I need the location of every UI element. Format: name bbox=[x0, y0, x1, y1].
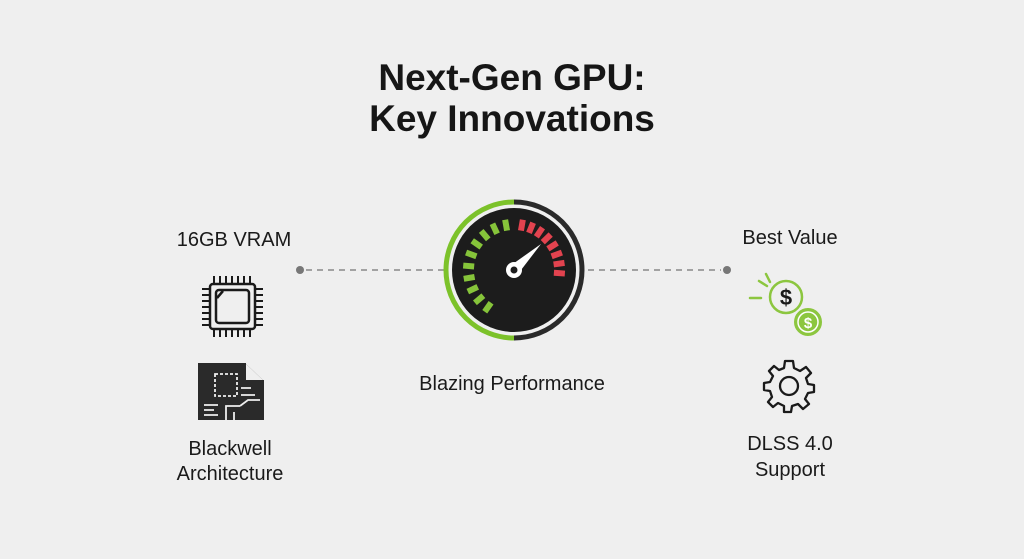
label: Best Value: Best Value bbox=[742, 227, 838, 249]
connector right bbox=[588, 266, 731, 274]
label: Blackwell Architecture: Blackwell bbox=[188, 438, 272, 460]
label: 16GB VRAM: 16GB VRAM bbox=[177, 229, 291, 251]
label: Blackwell Architecture: Architecture bbox=[177, 463, 283, 485]
icon: chip bbox=[202, 276, 263, 337]
title: Next-Gen GPU: bbox=[378, 57, 646, 98]
connector left bbox=[296, 266, 446, 274]
icon: blueprint bbox=[198, 363, 264, 420]
icon: gear bbox=[764, 361, 814, 412]
label: DLSS 4.0 Support bbox=[747, 433, 833, 481]
icon: coins: $ bbox=[804, 315, 813, 332]
icon: coins bbox=[750, 274, 823, 337]
icon: coins: $ bbox=[780, 285, 792, 310]
gauge bbox=[446, 202, 582, 338]
label: DLSS 4.0 Support: DLSS 4.0 bbox=[747, 433, 833, 455]
title: Key Innovations bbox=[369, 98, 655, 139]
label: Blazing Performance: Blazing Performance bbox=[419, 373, 605, 395]
title bbox=[369, 57, 655, 139]
label: Blackwell Architecture bbox=[177, 438, 283, 485]
label: DLSS 4.0 Support: Support bbox=[755, 459, 825, 481]
